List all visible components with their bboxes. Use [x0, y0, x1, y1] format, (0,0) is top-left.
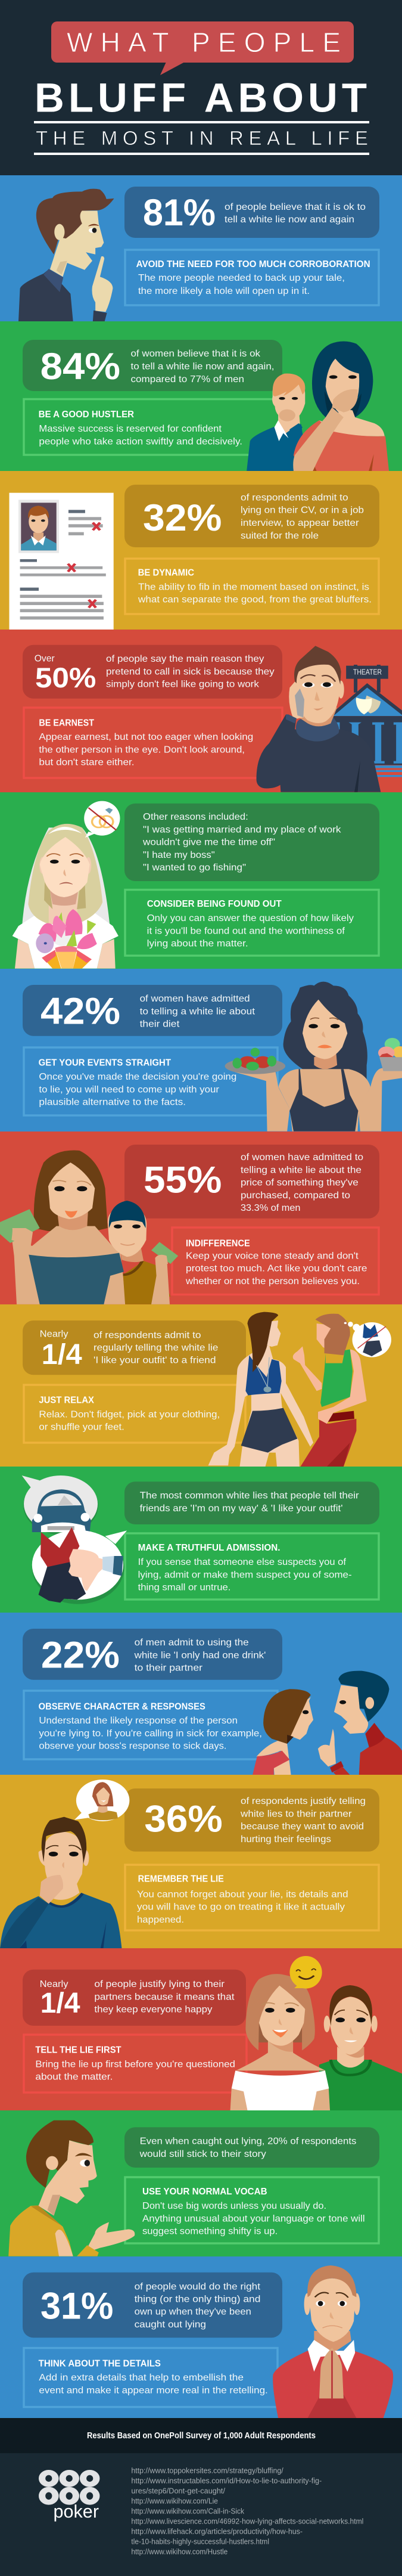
figure: theater building: [328, 665, 402, 777]
stat card: 36%: [144, 1799, 223, 1840]
stat card: 32%: [143, 497, 222, 539]
figure: CV with crossed out lines: [9, 493, 114, 630]
tip box: Appear earnest, but not too eager when looking: [39, 732, 253, 742]
tip box: [24, 2348, 278, 2407]
panel: survey source: [0, 2418, 402, 2453]
tip box: GET YOUR EVENTS STRAIGHT: [39, 1058, 171, 1068]
panel: 22 percent: [0, 1613, 402, 1775]
tip box: If you sense that someone else suspects you of: [138, 1557, 347, 1567]
stat card: [23, 340, 282, 391]
stat card: 84%: [40, 346, 120, 388]
source links: http://www.lifehack.org/articles/productivity/how-hus-: [131, 2527, 303, 2535]
stat card: of people believe that it is ok to: [225, 202, 366, 212]
stat card: lying on their CV, or in a job: [241, 506, 364, 516]
tip box: to lie, you will need to come up with your: [39, 1084, 220, 1095]
tip box: [125, 250, 379, 305]
panel: 81 percent: [0, 175, 402, 321]
stat card: 22%: [41, 1634, 120, 1676]
stat card: 55%: [144, 1160, 222, 1201]
tip box: [125, 1865, 379, 1930]
tip box: suggest something shifty is up.: [142, 2226, 278, 2236]
panel: nearly one quarter outfit: [0, 1304, 402, 1467]
figure: theater building: THEATER: [353, 668, 382, 677]
tip box: [125, 559, 379, 614]
stat card: [23, 645, 282, 699]
stat card: [23, 1970, 246, 2026]
stat card: of people justify lying to their: [94, 1979, 225, 1989]
stat card: telling a white lie about the: [241, 1165, 362, 1175]
tip box: what can separate the good, from the great bluffers.: [138, 595, 372, 605]
tip box: THINK ABOUT THE DETAILS: [39, 2358, 161, 2369]
stat card: [124, 485, 379, 547]
tip box: Massive success is reserved for confident: [39, 424, 222, 434]
panel: 32 percent: [0, 471, 402, 630]
tip box: Bring the lie up first before you're questioned: [35, 2059, 235, 2069]
stat card: [23, 985, 282, 1036]
tip box: You cannot forget about your lie, its details and: [137, 1889, 348, 1899]
text card: wouldn't give me the time off": [142, 838, 275, 848]
figure: unhappy bride: [13, 824, 119, 969]
stat card: 'I like your outfit' to a friend: [94, 1356, 216, 1366]
tip box: USE YOUR NORMAL VOCAB: [142, 2187, 267, 2197]
stat card: purchased, compared to: [241, 1191, 350, 1201]
stat card: own up when they've been: [135, 2307, 251, 2317]
tip box: Don't use big words unless you usually do.: [142, 2201, 326, 2211]
text card: friends are 'I'm on my way' & 'I like your outfit': [140, 1504, 343, 1514]
stat card: of men admit to using the: [135, 1638, 249, 1648]
tip box: you're lying to. If you're calling in sick for example,: [39, 1728, 262, 1738]
tip box: or shuffle your feet.: [39, 1422, 124, 1433]
figure: two girls talking: [208, 1312, 367, 1467]
tip box: [24, 1047, 278, 1115]
tip box: OBSERVE CHARACTER & RESPONSES: [39, 1701, 205, 1712]
stat card: to their partner: [135, 1663, 203, 1673]
tip box: thing small or untrue.: [138, 1582, 230, 1592]
stat card: tell a white lie now and again: [225, 215, 354, 225]
tip box: INDIFFERENCE: [186, 1238, 250, 1248]
figure: man shushing woman: [253, 1671, 402, 1775]
title: the most in real life: THE MOST IN REAL LIFE: [36, 127, 368, 149]
stat card: 50%: [35, 662, 96, 693]
stat card: of women have admitted: [140, 994, 250, 1004]
logo: 888 poker: poker: [54, 2501, 99, 2522]
stat card: [124, 1788, 379, 1852]
source links: http://www.wikihow.com/Call-in-Sick: [131, 2507, 245, 2515]
tip box: plausible alternative to the facts.: [39, 1097, 186, 1107]
title: bluff about: BLUFF ABOUT: [35, 75, 367, 120]
figure: woman weighing salad and ice cream: [225, 982, 402, 1132]
text card: [124, 1481, 379, 1524]
tip box: you will have to go on treating it like it actually: [137, 1902, 345, 1912]
tip box: Keep your voice tone steady and don't: [186, 1251, 359, 1261]
figure: praying man: [273, 2265, 393, 2418]
tip box: [24, 2035, 247, 2093]
tip box: CONSIDER BEING FOUND OUT: [147, 899, 282, 909]
stat card: to telling a white lie about: [140, 1006, 255, 1016]
text card: would still stick to their story: [139, 2149, 266, 2159]
source links: http://www.wikihow.com/Hustle: [131, 2547, 228, 2556]
panel: footer: [0, 2453, 402, 2576]
panel: white lies to friends: [0, 1467, 402, 1613]
tip box: lying about the matter.: [147, 939, 248, 949]
stat card: simply don't feel like going to work: [106, 679, 260, 689]
tip box: [125, 1533, 379, 1599]
tip box: Once you've made the decision you're going: [39, 1072, 236, 1082]
stat card: white lies to their partner: [240, 1809, 352, 1819]
panel: nearly one quarter partners: [0, 1948, 402, 2110]
stat card: they keep everyone happy: [94, 2004, 212, 2014]
tip box: the other person in the eye. Don't look around,: [39, 745, 245, 755]
stat card: of women have admitted to: [241, 1152, 363, 1163]
tip box: BE DYNAMIC: [138, 568, 194, 578]
source links: ures/step6/Dont-get-caught/: [131, 2487, 226, 2495]
figure: smiling couple: [230, 1956, 402, 2110]
panel: 42 percent: [0, 969, 402, 1132]
stat card: caught out lying: [135, 2320, 206, 2330]
panel: 55 percent: [0, 1132, 402, 1304]
stat card: 31%: [40, 2285, 113, 2327]
source links: http://www.toppokersites.com/strategy/bluffing/: [131, 2466, 283, 2475]
title speech bubble: [51, 21, 354, 75]
tip box: MAKE A TRUTHFUL ADMISSION.: [138, 1543, 280, 1553]
tip box: happened.: [137, 1915, 184, 1925]
tip box: [24, 1385, 245, 1443]
tip box: Understand the likely response of the person: [39, 1716, 238, 1726]
text card: "I was getting married and my place of work: [143, 824, 342, 835]
stat card: of people would do the right: [135, 2281, 261, 2292]
tip box: [125, 889, 379, 956]
panel: 84 percent: [0, 321, 402, 471]
tip box: lying, admit or make them suspect you of some-: [138, 1570, 352, 1580]
stat card: Nearly: [40, 1329, 68, 1339]
logo: 888 poker: [42, 2472, 99, 2522]
text card: Other reasons included:: [143, 812, 248, 822]
panel: 20 percent stick to story: [0, 2110, 402, 2256]
panel: over 50 percent: [0, 630, 402, 792]
tip box: BE A GOOD HUSTLER: [39, 410, 134, 420]
figure: man on phone: [256, 646, 381, 792]
stat card: pretend to call in sick is because they: [106, 667, 275, 677]
text card: "I wanted to go fishing": [143, 863, 246, 873]
stat card: interview, to appear better: [241, 518, 359, 528]
tip box: but don't stare either.: [39, 757, 135, 767]
tip box: [172, 1227, 379, 1295]
icon: crossed out wedding rings bubble: [84, 801, 120, 838]
source links: http://www.livescience.com/46992-how-lying-affects-social-networks.html: [131, 2517, 363, 2525]
text card: "I hate my boss": [143, 850, 215, 860]
stat card: their diet: [140, 1019, 180, 1030]
panel: 36 percent: [0, 1775, 402, 1948]
title: the most in real life: [34, 121, 369, 155]
tip box: [125, 2177, 379, 2243]
icon: thought bubble with woman: [74, 1780, 129, 1821]
stat card: 1/4: [42, 1339, 82, 1371]
stat card: of respondents admit to: [241, 492, 348, 503]
tip box: whether or not the person believes you.: [185, 1276, 360, 1287]
text card: The most common white lies that people tell their: [140, 1491, 359, 1501]
stat card: hurting their feelings: [241, 1834, 331, 1845]
figure: man shushing: [18, 189, 114, 321]
text card: [124, 2127, 379, 2168]
panel: other reasons: [0, 792, 402, 969]
stat card: partners because it means that: [94, 1992, 235, 2002]
tip box: JUST RELAX: [39, 1396, 94, 1406]
tip box: Relax. Don't fidget, pick at your clothing,: [39, 1409, 220, 1419]
stat card: thing (or the only thing) and: [135, 2295, 260, 2305]
stat card: compared to 77% of men: [131, 374, 244, 385]
figure: thinking man: [0, 1817, 121, 1948]
source links: http://www.instructables.com/id/How-to-lie-to-authority-fig-: [131, 2476, 322, 2485]
stat card: Nearly: [40, 1979, 68, 1989]
panel: 31 percent: [0, 2256, 402, 2418]
source links: [131, 2466, 363, 2556]
stat card: of people say the main reason they: [106, 654, 264, 664]
tip box: Anything unusual about your language or tone will: [142, 2214, 365, 2224]
tip box: about the matter.: [35, 2072, 113, 2082]
figure: man talking: [8, 2121, 135, 2256]
stat card: white lie 'I only had one drink': [134, 1650, 266, 1660]
source links: tle-10-habits-highly-successful-hustlers.html: [131, 2537, 269, 2546]
tip box: people who take action swiftly and decisively.: [39, 437, 242, 447]
panel: survey source: Results Based on OnePoll Survey of 1,000 Adult Respondents: [87, 2431, 316, 2441]
stat card: 33.3% of men: [241, 1203, 300, 1213]
stat card: of women believe that it is ok: [131, 349, 261, 359]
tip box: [24, 399, 285, 455]
tip box: REMEMBER THE LIE: [138, 1874, 224, 1884]
stat card: 42%: [40, 991, 120, 1033]
stat card: suited for the role: [241, 531, 319, 541]
stat card: of respondents admit to: [94, 1330, 201, 1340]
tip box: protest too much. Act like you don't care: [186, 1264, 367, 1274]
tip box: Add in extra details that help to embellish the: [39, 2373, 244, 2383]
tip box: it is you'll be found out and the worthiness of: [147, 926, 345, 937]
stat card: [23, 2273, 282, 2338]
stat card: because they want to avoid: [241, 1822, 364, 1832]
tip box: The more people needed to back up your tale,: [138, 273, 345, 283]
stat card: price of something they've: [241, 1178, 359, 1188]
stat card: [124, 187, 379, 238]
tip box: TELL THE LIE FIRST: [35, 2045, 121, 2056]
source links: http://www.wikihow.com/Lie: [131, 2497, 218, 2505]
tip box: [24, 1691, 278, 1759]
icon: thought bubble with crossed out outfit: [344, 1322, 391, 1357]
tip box: BE EARNEST: [39, 718, 94, 729]
stat card: Over: [35, 654, 55, 664]
stat card: [23, 1320, 246, 1375]
stat card: regularly telling the white lie: [94, 1343, 218, 1353]
panel: header: [0, 0, 402, 175]
icon: thumbs down on outfit bubble: [32, 1527, 127, 1604]
tip box: the more likely a hole will open up in it.: [138, 286, 310, 296]
tip box: Only you can answer the question of how likely: [147, 913, 354, 923]
icon: car speech bubble: [22, 1475, 98, 1535]
stat card: 1/4: [40, 1988, 80, 2019]
tip box: event and make it appear more real in the retelling.: [39, 2385, 268, 2395]
stat card: [124, 1145, 379, 1219]
title speech bubble: WHAT PEOPLE: [67, 27, 341, 58]
stat card: [23, 1629, 282, 1680]
tip box: [24, 708, 282, 778]
tip box: The ability to fib in the moment based on instinct, is: [138, 582, 369, 592]
figure: woman and man holding money: [0, 1151, 178, 1304]
stat card: to tell a white lie now and again,: [131, 362, 274, 372]
tip box: AVOID THE NEED FOR TOO MUCH CORROBORATION: [136, 259, 370, 269]
stat card: 81%: [143, 192, 216, 234]
tip box: observe your boss's response to sick days.: [39, 1741, 227, 1752]
text card: [124, 804, 379, 881]
figure: man and woman covering mouths: [247, 341, 389, 471]
stat card: of respondents justify telling: [241, 1796, 366, 1806]
text card: Even when caught out lying, 20% of respondents: [140, 2137, 356, 2147]
